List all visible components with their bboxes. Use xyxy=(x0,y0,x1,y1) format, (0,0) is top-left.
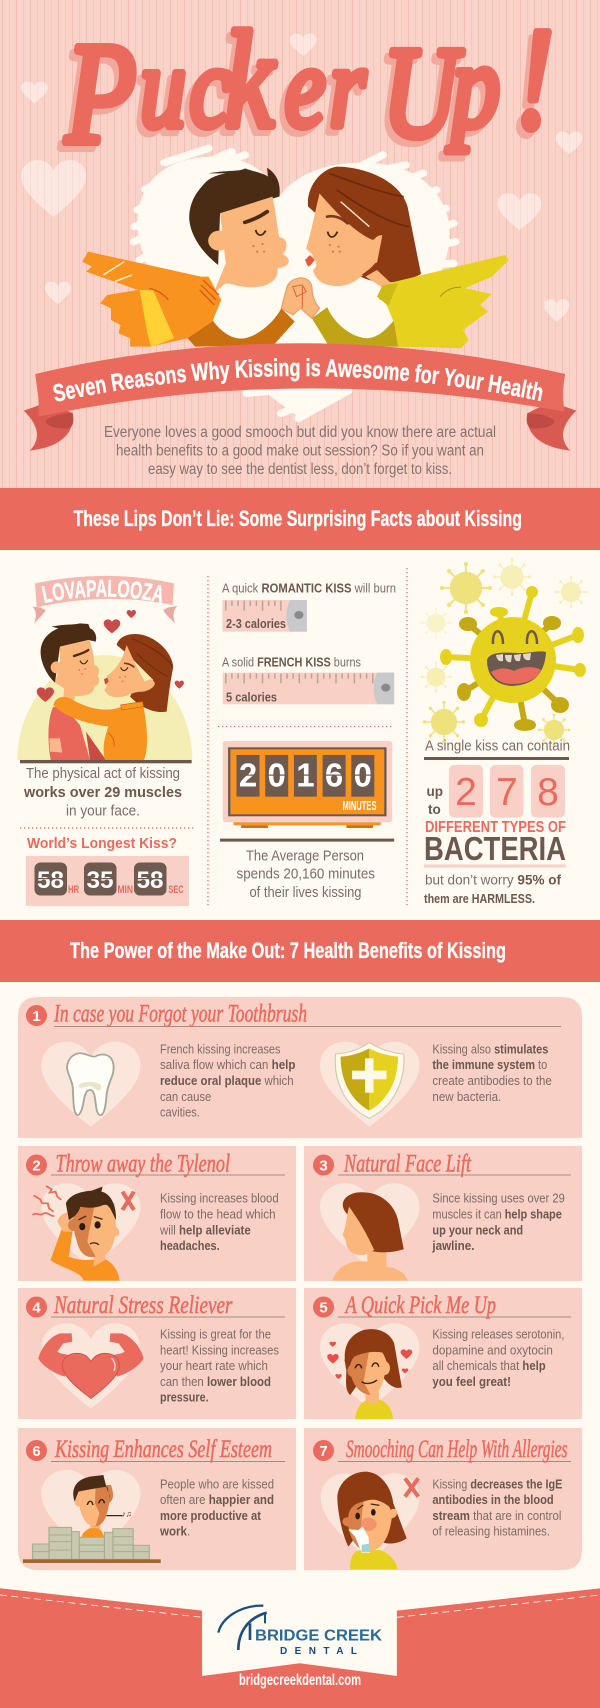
number badge xyxy=(26,1005,47,1026)
flip numbers xyxy=(37,867,164,894)
panel: benefit 5 xyxy=(304,1288,582,1419)
benefit text: can then lower blood xyxy=(160,1375,271,1389)
benefit text: cavities. xyxy=(160,1106,200,1120)
benefit text: you feel great! xyxy=(432,1375,511,1389)
benefit text xyxy=(159,1191,279,1253)
flip numbers: 35 xyxy=(86,867,114,894)
muscles text: works over 29 muscles xyxy=(23,785,182,801)
logo: DENTAL xyxy=(280,1646,357,1657)
up to: to xyxy=(428,802,441,817)
flip numbers: 58 xyxy=(37,867,64,894)
counter digits: 2 xyxy=(239,756,257,794)
small hearts xyxy=(37,610,184,702)
muscles text: in your face. xyxy=(66,804,140,820)
benefit text: Kissing releases serotonin, xyxy=(432,1327,564,1341)
units: HR xyxy=(68,884,79,896)
counter digits: 0 xyxy=(268,756,286,794)
illustration: kissing couple xyxy=(82,148,509,420)
benefit text xyxy=(160,1327,279,1405)
big bacteria xyxy=(443,589,583,728)
icon: man with paper stacks xyxy=(23,1470,161,1563)
title shadow: ! xyxy=(510,5,549,165)
title shadow: p xyxy=(441,25,495,159)
icon: woman with tissue xyxy=(321,1472,419,1569)
benefit title: Natural Face Lift xyxy=(343,1150,472,1178)
benefit text: heart! Kissing increases xyxy=(160,1343,279,1357)
benefit title: Throw away the Tylenol xyxy=(56,1150,230,1178)
number badge: 4 xyxy=(32,1300,41,1316)
benefit text xyxy=(159,1477,274,1539)
intro paragraph: easy way to see the dentist less, don’t forget to kiss. xyxy=(148,461,452,478)
benefit text: flow to the head which xyxy=(160,1207,276,1221)
muscles text xyxy=(23,766,182,820)
ribbon text: LOVAPALOOZA xyxy=(42,580,162,603)
panel: benefit 2 xyxy=(18,1146,296,1281)
benefit text 2: the immune system to xyxy=(432,1058,547,1072)
number badge: 6 xyxy=(32,1443,41,1460)
counter digits xyxy=(239,756,372,794)
benefit text xyxy=(431,1191,565,1253)
panel: benefit 7 xyxy=(304,1428,582,1570)
harmless note: them are HARMLESS. xyxy=(424,891,535,906)
title: u xyxy=(140,23,186,151)
benefit text: Kissing is great for the xyxy=(160,1327,271,1341)
benefit text: muscles it can help shape xyxy=(432,1207,562,1221)
yellow backdrop xyxy=(17,655,192,760)
benefit text: pressure. xyxy=(160,1391,209,1405)
tape 1 xyxy=(222,600,307,632)
digit numbers: 7 xyxy=(496,771,518,814)
icon: muscular heart xyxy=(38,1323,144,1409)
title: p xyxy=(446,19,500,153)
benefit text: dopamine and oxytocin xyxy=(432,1343,553,1357)
benefit text: of releasing histamines. xyxy=(432,1525,550,1539)
section band: facts xyxy=(0,488,600,550)
intro paragraph: health benefits to a good make out session? So if you want an xyxy=(116,442,484,460)
panel: benefit 4 xyxy=(18,1288,296,1419)
icon: headache man xyxy=(33,1183,140,1281)
benefit text: can cause xyxy=(160,1090,211,1104)
benefit title: A Quick Pick Me Up xyxy=(344,1292,496,1319)
units xyxy=(68,884,184,896)
benefit text xyxy=(432,1477,562,1539)
counter digits: 0 xyxy=(354,756,372,794)
ribbon xyxy=(33,576,177,624)
tape 2 label: 5 calories xyxy=(226,690,277,704)
intro paragraph xyxy=(104,424,496,478)
timer box xyxy=(26,856,189,906)
digit numbers: 2 xyxy=(455,771,477,814)
icon: man with paper stacks: ♪♫ xyxy=(122,1510,132,1519)
benefit text: reduce oral plaque which xyxy=(160,1074,294,1088)
benefit text 2: Kissing also stimulates xyxy=(432,1042,548,1056)
up to: up xyxy=(426,784,443,799)
counter caption: The Average Person xyxy=(246,848,364,864)
column dividers xyxy=(20,568,407,906)
benefit text: Kissing decreases the IgE xyxy=(432,1477,562,1491)
number badge xyxy=(26,1154,47,1176)
flip tiles xyxy=(34,862,166,896)
flip numbers: 58 xyxy=(136,867,164,894)
number badge: 7 xyxy=(319,1443,328,1460)
panel: world's longest kiss xyxy=(26,835,189,906)
clasped hands xyxy=(281,278,320,318)
benefit text: up your neck and xyxy=(432,1223,523,1237)
title shadow: P xyxy=(60,20,131,180)
muscles text: The physical act of kissing xyxy=(26,766,180,782)
counter caption: of their lives kissing xyxy=(250,885,362,901)
benefit text: often are happier and xyxy=(160,1493,274,1507)
icon: tooth xyxy=(41,1042,419,1127)
benefit text: Since kissing uses over 29 xyxy=(432,1191,565,1205)
footer xyxy=(0,1588,600,1708)
number badge xyxy=(313,1154,334,1176)
counter digits: 6 xyxy=(325,756,343,794)
digit numbers: 8 xyxy=(537,771,559,814)
title shadow: c xyxy=(185,29,225,157)
up to xyxy=(426,784,443,817)
number badge xyxy=(313,1296,334,1318)
benefit text: French kissing increases xyxy=(160,1042,280,1056)
banner ribbon xyxy=(24,343,576,451)
benefit text: your heart rate which xyxy=(160,1359,268,1373)
title: U xyxy=(382,21,464,165)
title shadow: r xyxy=(325,29,361,157)
title: e xyxy=(285,23,326,151)
benefit text: will help alleviate xyxy=(159,1223,251,1237)
title shadow: k xyxy=(220,11,271,163)
benefit title: Natural Stress Reliever xyxy=(53,1292,233,1319)
title: ! xyxy=(515,0,554,159)
bacteria word: BACTERIA xyxy=(424,830,566,867)
panel: lovapalooza xyxy=(17,576,192,820)
benefit title: Kissing Enhances Self Esteem xyxy=(54,1436,272,1463)
minutes label: MINUTES xyxy=(342,798,377,813)
icon: woman profile xyxy=(320,1183,419,1281)
website: bridgecreekdental.com xyxy=(239,1672,361,1689)
logo xyxy=(218,1606,382,1657)
benefit text 2: create antibodies to the xyxy=(432,1074,552,1088)
number badge xyxy=(26,1440,47,1461)
panel: minutes counter xyxy=(220,741,394,901)
benefit text: all chemicals that help xyxy=(432,1359,546,1373)
tape 2 xyxy=(223,673,394,704)
benefit text: headaches. xyxy=(160,1239,220,1253)
digit tiles xyxy=(449,765,565,818)
french kiss text: A solid FRENCH KISS burns xyxy=(222,654,361,670)
different types of: DIFFERENT TYPES OF xyxy=(425,819,566,836)
digit numbers xyxy=(455,771,559,814)
harmless note xyxy=(424,872,562,906)
logo: BRIDGE CREEK xyxy=(255,1628,382,1645)
intro paragraph: Everyone loves a good smooch but did you know there are actual xyxy=(104,424,496,441)
number badge xyxy=(313,1440,334,1461)
benefit text 2: new bacteria. xyxy=(432,1090,501,1104)
number badge: 5 xyxy=(319,1300,328,1316)
title: k xyxy=(225,5,276,157)
heading: World’s Longest Kiss? xyxy=(27,835,177,852)
benefit text: more productive at xyxy=(160,1509,262,1523)
icon: shield xyxy=(335,1043,404,1118)
benefit text: saliva flow which can help xyxy=(160,1058,296,1072)
scribble heart xyxy=(134,148,455,420)
section band: benefits xyxy=(0,920,600,982)
tape 1 label: 2-3 calories xyxy=(226,616,286,631)
benefit text: Kissing increases blood xyxy=(160,1191,279,1205)
counter digits: 1 xyxy=(296,756,315,794)
title shadow: U xyxy=(377,27,459,171)
number badge: 3 xyxy=(319,1158,328,1174)
woman xyxy=(305,167,509,348)
benefit text: stream that are in control xyxy=(432,1509,561,1523)
panel: hero striped background xyxy=(0,0,600,488)
title shadow: e xyxy=(280,29,321,157)
title: r xyxy=(330,23,366,151)
panel: benefit 1 xyxy=(18,997,582,1138)
benefit text xyxy=(160,1042,296,1120)
number badge xyxy=(26,1296,47,1318)
units: MIN xyxy=(118,884,133,896)
man xyxy=(82,168,295,347)
number badge: 2 xyxy=(32,1158,41,1174)
benefit text: work. xyxy=(159,1525,190,1539)
harmless note: but don’t worry 95% of xyxy=(425,872,562,888)
benefit text: jawline. xyxy=(431,1239,474,1253)
title: P xyxy=(65,14,136,174)
romantic kiss text: A quick ROMANTIC KISS will burn xyxy=(222,580,396,596)
benefit text: People who are kissed xyxy=(160,1477,274,1491)
number badge: 1 xyxy=(32,1008,41,1025)
bacteria caption: A single kiss can contain xyxy=(425,738,570,754)
mini couple xyxy=(41,623,173,760)
decorative floating hearts xyxy=(21,33,582,322)
counter caption: spends 20,160 minutes xyxy=(236,866,375,882)
panel: benefit 3 xyxy=(304,1146,582,1281)
benefit text 2 xyxy=(432,1042,552,1104)
banner text: Seven Reasons Why Kissing is Awesome for Your Health xyxy=(53,358,542,402)
title shadow: u xyxy=(135,29,181,157)
panel: bacteria xyxy=(421,558,587,906)
panel: benefit 6 xyxy=(18,1428,296,1570)
benefit text xyxy=(432,1327,564,1389)
panel: calories xyxy=(222,580,396,704)
small bacteria xyxy=(421,558,587,746)
icon: smiling woman xyxy=(320,1323,419,1419)
counter caption xyxy=(236,848,375,901)
title: c xyxy=(190,23,230,151)
units: SEC xyxy=(168,884,184,896)
benefit title: In case you Forgot your Toothbrush xyxy=(53,1000,307,1028)
benefit text: antibodies in the blood xyxy=(432,1493,554,1507)
